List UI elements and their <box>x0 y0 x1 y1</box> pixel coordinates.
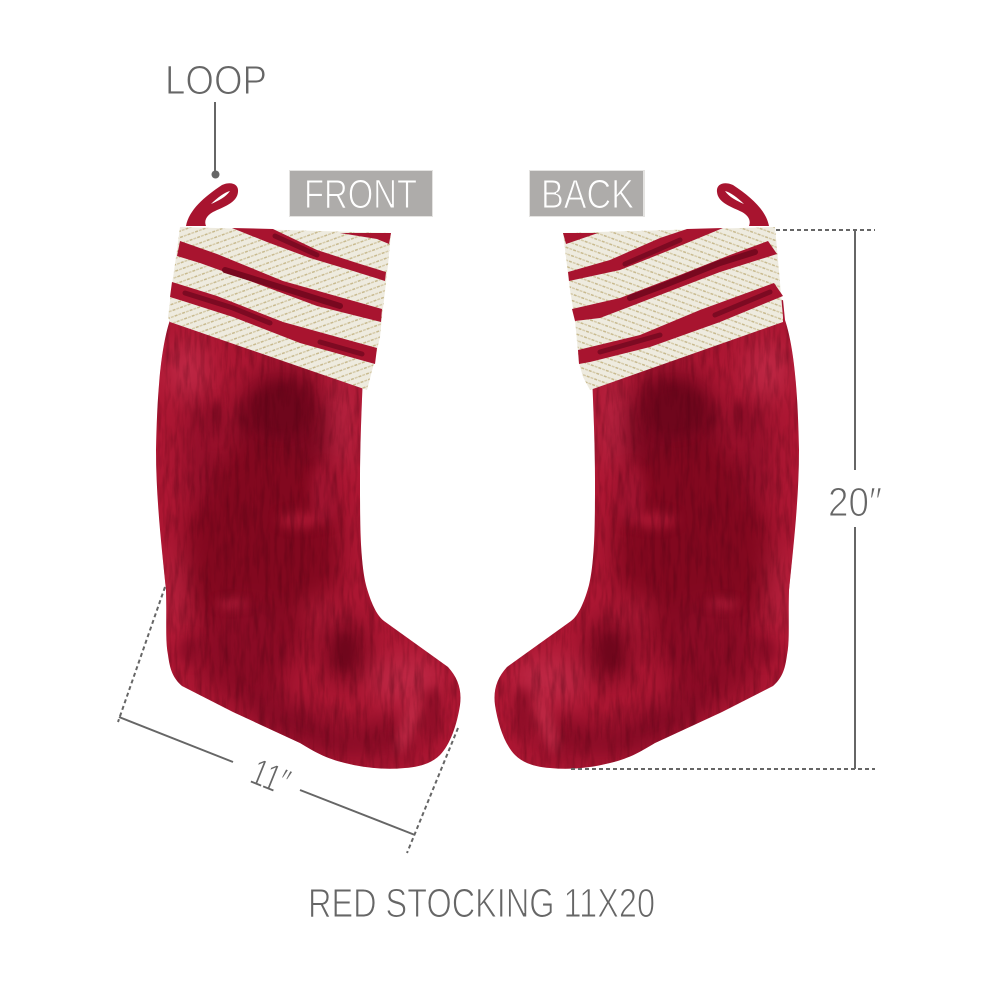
dimension: width 11 inches: 11″ <box>245 751 296 804</box>
back cuff <box>563 227 783 390</box>
back stocking <box>475 183 815 780</box>
dimension: width 11 inches <box>118 587 458 853</box>
loop pointer line <box>212 102 220 178</box>
front hanging loop <box>186 183 238 226</box>
front stocking <box>140 183 480 780</box>
badge: back: BACK <box>541 171 634 217</box>
front cuff <box>168 227 391 390</box>
badge: front: FRONT <box>304 171 417 217</box>
label: loop: LOOP <box>165 57 267 103</box>
title: RED STOCKING 11X20 <box>308 880 655 926</box>
dimension: height 20 inches: 20″ <box>828 479 882 525</box>
front velvet body <box>140 300 480 780</box>
back hanging loop <box>717 183 769 226</box>
back velvet body <box>475 300 815 780</box>
